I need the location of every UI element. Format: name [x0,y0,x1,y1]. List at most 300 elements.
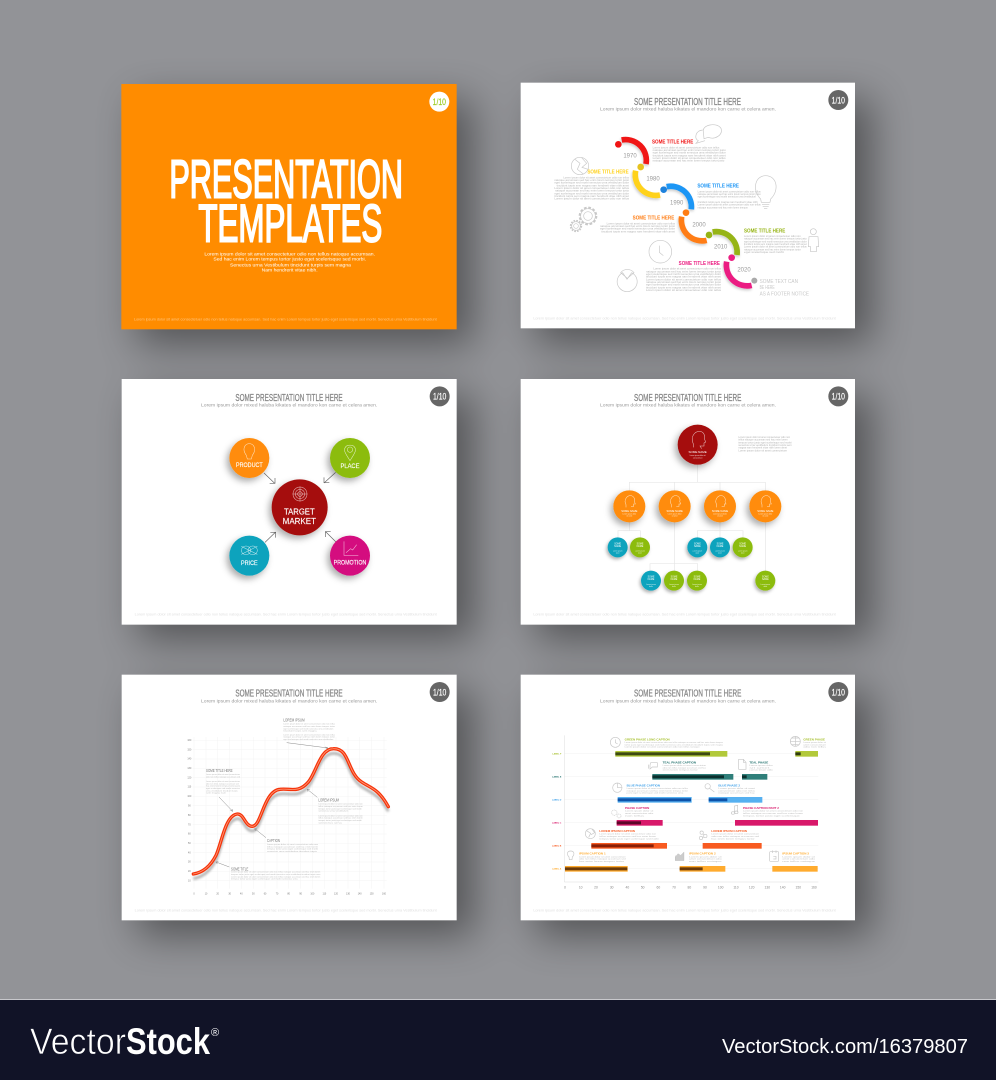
item 2010: tincidunt turpis sem magna nam hendrerit vitae nibh amet [744,243,807,246]
item 1980: SOME TITLE HERE [587,170,629,176]
row labels: LABEL E [552,776,562,779]
curve shadow [193,753,388,879]
panel: cover slide [121,84,457,329]
page badge: 1/10 [433,392,446,402]
cover subtitle [204,251,375,273]
timeline years [623,153,751,274]
small nodes row 1: dolor [616,553,620,555]
y axis labels: 30 [188,862,191,864]
callout: some title here: sem magna nam [206,793,227,795]
item 2020 [646,261,722,292]
root node: consectetuer [693,456,703,459]
footer notice: SOME TEXT CAN [760,279,798,285]
y axis labels: 110 [187,787,192,789]
slide title: SOME PRESENTATION TITLE HERE [235,393,343,404]
cover footer: Lorem ipsum dolor sit amet consectetuer odio non tellus natoque accumsan. Sed hac enim Lorem tempus tortor justo eget scelerisque sed morbi. Senectus urna Vestibulum tincidunt [134,318,437,322]
cover title: TEMPLATES [198,195,382,254]
x axis labels: 140 [780,886,786,890]
caption: blue: justo eget scelerisque sed morbi senectus urna [625,792,685,795]
x axis labels: 60 [264,894,267,896]
logo [30,1021,219,1062]
footer notice: AS A FOOTER NOTICE [760,291,809,297]
x axis labels [564,886,817,890]
item 2020: eget scelerisque sed morbi senectus urna vestibulum dolor [646,284,721,287]
caption: red [585,829,660,840]
slide footer: Lorem ipsum dolor sit amet consectetuer odio non tellus natoque accumsan. Sed hac enim Lorem tempus tortor justo eget scelerisque sed morbi. Senectus urna Vestibulum tincidunt [533,317,836,321]
footer notice: BE HERE [760,285,775,291]
caption: red 2: hac enim lorem tempus tortor [711,837,755,840]
side note: tempus tortor justo eget scelerisque sed morbi [738,441,792,444]
caption: green long: tortor justo eget scelerisque sed morbi senectus urna vestibulum tincidunt turpis sem magna [625,743,724,746]
item 1970: natoque accumsan sed hac enim lorem tempus tortor justo [653,160,725,163]
caption: blue 2: Lorem ipsum dolor sit amet [718,787,756,790]
y axis labels: 40 [188,852,191,854]
small nodes row 2: dolor [649,586,653,588]
callout: lorem ipsum top: Lorem ipsum dolor sit amet consectetuer odio non tellus [283,733,335,736]
item 2020: tincidunt turpis sem magna nam hendrerit vitae nibh amet [646,276,721,279]
icon: pie chart [617,269,637,292]
icon: light bulb [755,176,776,208]
item 2020: tincidunt turpis sem magna nam hendrerit vitae nibh amet [646,286,721,289]
logo: ® [211,1027,219,1039]
caption: orange 3 [770,850,816,863]
small nodes row 2: dolor [763,586,768,588]
callout: lorem ipsum right: tellus natoque accumsan sed hac enim lorem [318,817,363,820]
item 1990: eget scelerisque sed morbi senectus urna vestibulum [698,196,756,199]
x axis labels: 120 [749,886,755,890]
y axis labels: 50 [188,843,191,845]
green bars [615,751,818,757]
callout: lorem ipsum top [283,718,335,749]
y axis labels: 80 [188,815,191,817]
node: price: PRICE [241,560,258,567]
caption: pink part 2: tellus natoque accumsan sed hac enim lorem [743,812,804,815]
page badge: 1/10 [433,687,446,697]
arrows [264,472,336,542]
item 1970: tincidunt turpis sem magna nam hendrerit vitae nibh amet [653,154,726,157]
small nodes row 1: SOME [614,543,622,545]
item 1990 [697,184,762,209]
small nodes row 1: NAME [694,545,701,548]
item 1980 [554,170,630,201]
timeline years: 2000 [692,222,706,228]
small nodes row 2: NAME [648,578,655,581]
caption: teal: TEAL PHASE CAPTION [663,761,696,764]
caption: red 2 [699,830,760,840]
caption: orange 2: amet consectetuer odio [689,858,722,861]
caption: pink: PHASE CAPTION [625,807,650,810]
caption: red: Lorem ipsum dolor sit amet consectetuer odio non [599,833,656,836]
caption: green phase: amet consectetuer [803,743,827,746]
y axis labels [187,740,192,882]
slide footer: Lorem ipsum dolor sit amet consectetuer odio non tellus natoque accumsan. Sed hac enim Lorem tempus tortor justo eget scelerisque sed morbi. Senectus urna Vestibulum tincidunt [135,908,437,912]
callout: lorem ipsum top: Lorem ipsum dolor sit amet consectetuer odio non tellus [283,723,335,726]
x axis labels: 160 [811,886,817,890]
page badge [430,386,450,406]
icon: person [808,229,819,252]
callout: lorem ipsum top: natoque accumsan sed hac enim lorem tempus tortor [283,725,335,728]
x axis labels: 90 [299,894,303,896]
slide footer: Lorem ipsum dolor sit amet consectetuer odio non tellus natoque accumsan. Sed hac enim Lorem tempus tortor justo eget scelerisque sed morbi. Senectus urna Vestibulum tincidunt [135,613,437,617]
caption: red: tellus natoque accumsan sed hac enim lorem [599,835,657,838]
small nodes row 2: SOME [762,576,769,578]
slide subtitle: Lorem ipsum dolor mixed haluba kikates el mandoro kon carne et celera amen. [201,699,377,704]
caption: blue 2: natoque accumsan sed hac [718,792,755,795]
small nodes row 1: SOME [637,543,644,545]
timeline years: 1980 [646,176,660,182]
item 2010: SOME TITLE HERE [744,228,786,234]
slide subtitle: Lorem ipsum dolor mixed haluba kikates el mandoro kon carne et celera amen. [201,403,377,408]
cover title [169,150,403,254]
item 1970: eget scelerisque sed morbi senectus urna vestibulum dolor [653,152,726,155]
caption: orange 3: Lorem ipsum dolor sit [782,855,816,858]
node: product: PRODUCT [236,462,263,469]
x axis labels [193,894,387,896]
caption: orange 3: IPSUM CAPTION 3 [782,853,810,856]
caption: red 2: odio non tellus natoque accumsan sed [711,835,759,838]
node: promotion: PROMOTION [334,559,366,566]
orange node 4: sit amet [762,515,769,518]
y axis labels: 120 [187,777,192,779]
caption: green phase: odio non tellus [803,746,826,749]
x axis labels: 100 [718,886,724,890]
timeline arcs [622,140,752,286]
caption: blue: Lorem ipsum dolor sit amet consectetuer odio non tellus [627,787,688,790]
item 2020: natoque accumsan sed hac enim lorem tempus tortor justo [646,281,722,284]
orange node 3 [704,490,736,522]
caption: pink: amet consectetuer odio [625,812,653,815]
callout: lorem ipsum right: LOREM IPSUM [318,798,339,803]
slide title: SOME PRESENTATION TITLE HERE [235,689,343,700]
item 2020: natoque accumsan sed hac enim lorem tempus tortor justo [646,270,722,273]
caption: orange 1: hac enim lorem tempus tortor [579,860,625,863]
item 2010: natoque accumsan sed hac enim lorem tempus tortor justo [744,238,807,241]
item 2000: natoque accumsan sed hac enim lorem tempus tortor justo [600,225,676,228]
callout: lorem ipsum top: natoque accumsan sed hac enim lorem tempus tortor [283,736,335,739]
panel: line chart slide [122,675,457,920]
callout: some title here [206,768,240,811]
item 2000: eget scelerisque sed morbi senectus urna vestibulum dolor [600,228,675,231]
callout: some title [216,862,321,880]
item 1980: Lorem ipsum dolor sit amet consectetuer odio non tellus [554,198,630,201]
root node: Lorem ipsum dolor sit [690,454,706,457]
x axis labels: 70 [276,894,279,896]
row labels: LABEL A [552,868,562,871]
small nodes row 2: SOME [671,576,678,578]
caption: orange 2 [675,852,723,863]
slide background [521,379,855,625]
item 2020: eget scelerisque sed morbi senectus urna vestibulum dolor [646,273,721,276]
caption: teal: odio non tellus natoque accumsan sed hac [663,766,706,769]
callout: caption: tellus natoque accumsan sed hac enim lorem [267,845,319,848]
side note: magna nam hendrerit vitae nibh lorem amet [738,447,787,450]
small nodes row 1: Lorem ipsum [635,551,645,553]
small nodes row 2: Lorem ipsum [761,584,771,586]
icon: clock [649,240,672,263]
callout: caption: Lorem ipsum dolor sit amet consectetuer odio non [267,843,318,846]
item 1980: tincidunt turpis sem magna nam hendrerit vitae nibh amet [554,195,629,198]
x axis labels: 40 [625,886,629,890]
y axis labels: 100 [187,796,192,798]
side note: Lorem ipsum dolor sit amet consectetuer odio non [738,436,791,439]
callout: some title here: Lorem ipsum dolor sit amet consectetuer [206,780,240,783]
callout: lorem ipsum right: Lorem ipsum dolor sit amet consectetuer odio non [318,814,363,817]
callout: lorem ipsum right: tempus tortor justo eget scelerisque sed morbi [318,819,362,822]
node: target market [272,479,328,535]
side note: senectus urna vestibulum tincidunt turpis sem [738,444,792,447]
slide footer: Lorem ipsum dolor sit amet consectetuer odio non tellus natoque accumsan. Sed hac enim Lorem tempus tortor justo eget scelerisque sed morbi. Senectus urna Vestibulum tincidunt [533,908,836,912]
small nodes row 1: Lorem ipsum [613,551,623,553]
item 2000: tincidunt turpis sem magna nam hendrerit vitae nibh amet [601,230,675,233]
row labels: LABEL B [552,845,562,848]
slide subtitle: Lorem ipsum dolor mixed haluba kikates el mandoro kon carne et celera amen. [600,107,776,112]
slide background [521,83,855,328]
node: price [229,536,269,576]
item 1980: eget scelerisque sed morbi senectus urna vestibulum dolor [554,182,629,185]
timeline years: 2010 [714,245,728,251]
callout: lorem ipsum right: senectus urna [318,821,344,824]
y axis labels: 60 [188,834,191,836]
callout: some title here: odio non tellus natoque accumsan sed [206,775,240,778]
cover subtitle: Sed hac enim Lorem tempus tortor justo eget scelerisque sed morbi. [213,257,366,262]
pink bars [617,820,818,826]
node: target market: MARKET [283,516,317,526]
blue bars [618,797,762,803]
callout: some title: tempus tortor justo eget scelerisque sed morbi senectus urna [231,877,299,880]
caption: red 2: LOREM IPSUM CAPTION [711,830,747,833]
logo: Stock [126,1021,210,1062]
timeline dots [615,141,757,284]
page badge: 1/10 [832,392,845,402]
callout: lorem ipsum top: eget scelerisque sed morbi senectus urna vestibulum [283,727,334,730]
small nodes row 1: SOME [739,543,747,545]
x axis labels: 150 [370,894,374,896]
callout: caption: CAPTION [267,838,280,843]
caption: orange 1: Lorem ipsum dolor sit amet consectetuer [579,855,626,858]
caption: blue 2 [705,784,756,795]
caption: orange 1: odio non tellus natoque accumsan sed [579,858,626,861]
x axis labels: 110 [322,894,327,896]
slide title: SOME PRESENTATION TITLE HERE [634,689,742,700]
caption: teal: enim lorem tempus tortor [663,769,698,772]
timeline years: 1990 [670,200,684,206]
caption: teal phase: consectetuer odio [749,769,773,772]
caption: blue: natoque accumsan sed hac enim lorem tempus tortor [627,789,689,792]
x axis labels: 50 [252,894,255,896]
small nodes row 1: SOME [717,543,724,545]
item 2000: SOME TITLE HERE [633,216,675,222]
node: place [330,438,370,478]
item 2010: Lorem ipsum dolor sit amet consectetuer odio non tellus [744,246,808,249]
x axis labels: 140 [358,894,362,896]
item 1970: Lorem ipsum dolor sit amet consectetuer odio non tellus [653,146,720,149]
orange node 2: Lorem ipsum dolor [668,514,682,516]
x axis labels: 90 [703,886,707,890]
item 2010: eget scelerisque sed morbi [744,251,785,254]
image id: VectorStock.com/16379807 [722,1036,968,1058]
node: place: PLACE [340,463,360,470]
small nodes row 2: Lorem ipsum [692,584,702,586]
item 1980: natoque accumsan sed hac enim lorem tempus tortor justo [555,190,630,193]
timeline years: 2020 [737,268,751,274]
cover subtitle: Lorem ipsum dolor sit amet consectetuer odio non tellus natoque accumsan. [204,251,375,256]
x axis labels: 30 [610,886,614,890]
small nodes row 1: SOME [694,543,701,545]
slide subtitle: Lorem ipsum dolor mixed haluba kikates el mandoro kon carne et celera amen. [600,699,776,704]
orange node 1: sit amet [626,515,633,518]
caption: orange 2: Lorem ipsum dolor sit [689,855,723,858]
caption: pink part 2: Lorem ipsum dolor sit amet consectetuer odio non [743,810,803,813]
page badge: 1/10 [832,95,845,105]
callout: some title here: urna vestibulum tincidunt turpis [206,789,238,792]
x axis labels: 60 [656,886,660,890]
orange node 2 [659,490,691,522]
caption: red: LOREM IPSUM CAPTION [599,830,635,833]
item 1990: tincidunt turpis sem magna nam hendrerit vitae nibh [698,201,758,204]
orange node 3: SOME NAME [712,509,728,513]
caption: teal phase: Lorem ipsum dolor [749,765,773,767]
cover subtitle: Nam hendrerit vitae nibh. [262,268,318,273]
callout: lorem ipsum right: senectus urna vestibulum [318,810,349,813]
orange node 1 [613,490,645,522]
x axis labels: 50 [641,886,645,890]
y axis labels: 70 [188,824,191,826]
small nodes row 2: SOME [694,576,701,578]
caption: teal: Lorem ipsum dolor sit amet consectetuer [663,764,706,767]
orange node 1: Lorem ipsum dolor [622,514,637,516]
small nodes row 2: NAME [671,578,678,581]
small nodes row 1: NAME [739,545,746,548]
callout: some title: tempus tortor justo eget scelerisque sed morbi senectus urna vestibulum tincidunt turpis sem [231,873,321,876]
callout: some title: SOME TITLE [231,866,248,871]
caption: green long: GREEN PHASE LONG CAPTION [625,738,670,741]
panel: target market slide [122,379,457,625]
caption: orange 2: non tellus natoque [689,860,722,863]
x axis labels: 20 [216,894,220,896]
callout: some title here: SOME TITLE HERE [206,768,233,773]
cover title: PRESENTATION [169,150,403,209]
item 2020: SOME TITLE HERE [679,261,720,267]
small nodes row 2: Lorem ipsum [669,584,679,586]
node: promotion [330,536,370,576]
small nodes row 1: NAME [637,545,644,548]
item 1990: natoque accumsan sed hac enim lorem tempus [698,206,749,209]
item 1980: eget scelerisque sed morbi senectus urna vestibulum dolor [554,192,629,195]
callout: lorem ipsum top: LOREM IPSUM [283,718,305,723]
slide title: SOME PRESENTATION TITLE HERE [634,393,742,404]
caption: orange 2: IPSUM CAPTION 2 [689,853,716,856]
slide subtitle: Lorem ipsum dolor mixed haluba kikates el mandoro kon carne et celera amen. [600,403,776,408]
callout: caption: tempus tortor justo eget scelerisque sed morbi [267,848,319,851]
y axis labels: 90 [188,805,191,807]
y axis labels: 150 [187,749,192,751]
page badge: 1/10 [433,97,446,107]
x axis labels: 40 [240,894,243,896]
item 1980: tincidunt turpis sem magna nam hendrerit vitae nibh amet [557,184,629,187]
caption: green phase [790,736,827,749]
caption: red 2: Lorem ipsum dolor sit amet consectetuer [711,833,760,836]
small nodes row 1: NAME [614,545,621,548]
small nodes row 1: dolor [718,553,722,555]
small nodes row 2: NAME [694,578,701,581]
caption: green long: Lorem ipsum dolor sit amet consectetuer odio non tellus natoque [625,746,700,749]
panel: gantt slide [521,675,855,920]
row labels [552,753,562,871]
teal bars [652,774,767,780]
icon: globe [571,157,589,175]
caption: orange 3: non tellus natoque [782,860,815,863]
item 1970: SOME TITLE HERE [652,140,694,146]
slide background [122,379,457,625]
item 2020: Lorem ipsum dolor sit amet consectetuer odio non tellus [646,289,722,292]
side note [738,436,792,452]
item 1970: natoque accumsan sed hac enim lorem tempus tortor justo [653,149,727,152]
cover subtitle: Senectus urna Vestibulum tincidunt turpis sem magna [230,262,352,267]
x axis labels: 100 [310,894,315,896]
x axis labels: 160 [382,894,387,896]
x axis labels: 110 [733,886,739,890]
caption: teal [649,761,706,772]
timeline years: 1970 [623,153,637,159]
small nodes row 1: dolor [741,553,745,555]
caption: green long: Lorem ipsum dolor sit amet consectetuer odio non tellus natoque accumsan sed hac enim lorem tempus [625,741,723,744]
item 2010: natoque accumsan sed hac enim lorem tempus tortor [744,248,801,251]
small nodes row 2: NAME [762,578,769,581]
slide background [521,675,855,920]
root node [678,425,718,465]
caption: orange 3: amet consectetuer odio [782,858,815,861]
caption: blue 2: BLUE PHASE 2 [718,784,741,787]
page badge [828,386,848,406]
item 2000: Lorem ipsum dolor sit amet consectetuer odio non tellus [607,222,676,225]
row labels: LABEL F [552,753,562,756]
orange node 2: sit amet [672,515,678,518]
caption: orange 1 [567,851,626,863]
axes [564,754,818,869]
caption: pink: Lorem ipsum dolor sit [625,810,654,813]
red bars [591,843,762,849]
callout: caption: senectus urna vestibulum tincidunt turpis [267,850,317,853]
orange node 4: Lorem ipsum dolor [758,514,773,516]
node: target market: TARGET [284,507,315,517]
slide footer: Lorem ipsum dolor sit amet consectetuer odio non tellus natoque accumsan. Sed hac enim Lorem tempus tortor justo eget scelerisque sed morbi. Senectus urna Vestibulum tincidunt [533,613,836,617]
orange node 4: SOME NAME [757,509,774,513]
x axis labels: 80 [687,886,691,890]
item 2010: Lorem ipsum dolor sit amet consectetuer odio non [744,235,801,238]
item 1990: natoque accumsan sed hac enim lorem tempus tortor justo [698,193,761,196]
page badge [828,90,848,110]
caption: green phase: Lorem ipsum dolor sit [803,741,827,744]
item 1990: SOME TITLE HERE [697,184,739,190]
caption: pink part 2 [731,805,804,817]
item 2020: Lorem ipsum dolor sit amet consectetuer odio non tellus [646,278,722,281]
side note: tellus natoque accumsan sed hac enim lorem [738,439,788,442]
orange node 3: Lorem ipsum dolor [713,514,727,516]
item 1970: Lorem ipsum dolor sit amet consectetuer odio non tellus [653,157,727,160]
callout: lorem ipsum right: tempus tortor justo eget scelerisque sed morbi [318,807,362,810]
x axis labels: 30 [228,894,232,896]
x axis labels: 0 [564,886,566,890]
item 2010 [744,228,808,254]
y axis labels: 140 [187,759,192,761]
orange node 4 [749,490,781,522]
x axis labels: 10 [579,886,583,890]
caption: blue 2: consectetuer odio non tellus [718,789,755,792]
caption: pink part 2: PHASE CAPTION PART 2 [743,807,780,810]
side note: Lorem ipsum dolor sit amet consectetuer [738,449,787,452]
item 2000 [600,216,676,233]
y axis labels: 130 [187,768,192,770]
